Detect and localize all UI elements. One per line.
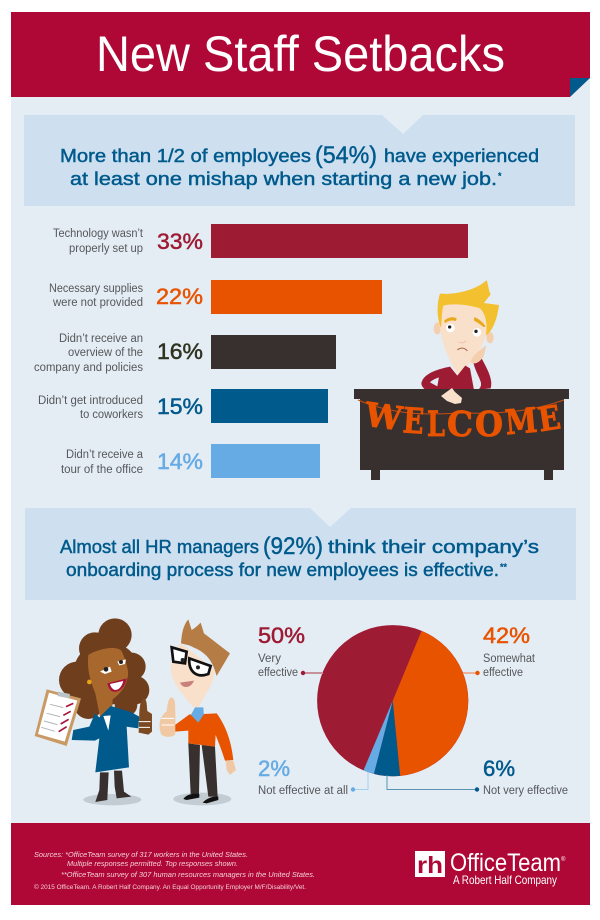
- sources: Sources: *OfficeTeam survey of 317 workers in the United States.: [34, 850, 248, 859]
- pie label: 2%: [258, 756, 368, 797]
- callout text: [60, 142, 539, 189]
- row: technology: 33%: [157, 229, 203, 254]
- row: coworkers: 15%: [157, 394, 203, 419]
- pie label: 6%: Not very effective: [483, 785, 568, 797]
- callout text: [60, 533, 539, 580]
- slice: not very effective: [374, 701, 400, 776]
- pie label: 42%: 42%: [483, 623, 530, 648]
- callout text: More than 1/2 of employees: [60, 146, 311, 166]
- row: coworkers: [38, 389, 328, 423]
- icon: welcome banner: W: [362, 395, 406, 439]
- pie label: 50%: Very: [258, 653, 281, 665]
- panel: title banner: [11, 12, 590, 97]
- row: overview: [34, 333, 336, 374]
- sources: **OfficeTeam survey of 307 human resources managers in the United States.: [61, 870, 315, 879]
- icon: man: [421, 280, 499, 398]
- shadows: [83, 794, 141, 805]
- pie label: 50%: 50%: [258, 623, 305, 648]
- icon: welcome banner: O: [475, 404, 503, 445]
- row: coworkers: Didn’t get introduced: [38, 395, 143, 407]
- illustration: bored man at welcome desk: [354, 280, 569, 480]
- logo: [415, 849, 566, 887]
- sources: [34, 850, 315, 879]
- row: overview: overview of the: [68, 347, 143, 359]
- row: technology: [53, 224, 468, 258]
- panel: page background: [11, 97, 590, 824]
- logo: OfficeTeam: [450, 849, 561, 877]
- woman: [35, 618, 152, 802]
- icon: welcome banner: E: [401, 400, 425, 443]
- row: overview: company and policies: [34, 362, 143, 374]
- panel: HR managers callout: [25, 508, 576, 600]
- pie label: 2%: 2%: [258, 756, 290, 781]
- callout text: (92%): [263, 533, 323, 560]
- icon: welcome banner: L: [427, 404, 445, 445]
- desk: [354, 389, 569, 480]
- row: supplies: 22%: [156, 284, 203, 309]
- row: overview: 16%: [157, 339, 203, 364]
- pie label: 6%: 6%: [483, 756, 515, 781]
- row: coworkers: to coworkers: [80, 409, 143, 421]
- callout text: Almost all HR managers: [60, 537, 259, 557]
- pie label: 42%: Somewhat: [483, 653, 536, 665]
- row: tour: Didn’t receive a: [66, 449, 144, 461]
- logo: rh: [417, 852, 443, 878]
- slice: somewhat effective: [393, 631, 468, 776]
- slice: not effective at all: [364, 701, 393, 774]
- callout text: have experienced: [384, 146, 539, 166]
- row: tour: tour of the office: [61, 464, 143, 476]
- logo: A Robert Half Company: [453, 873, 557, 887]
- copyright: © 2015 OfficeTeam. A Robert Half Company. An Equal Opportunity Employer M/F/Disability/Vet.: [34, 883, 306, 891]
- pie label: 2%: Not effective at all: [258, 785, 348, 797]
- callout text: **: [500, 562, 508, 572]
- slice: very effective: [317, 625, 468, 776]
- pie label: 42%: effective: [483, 667, 523, 679]
- illustration: woman and man giving thumbs up: [35, 618, 236, 805]
- icon: man's hand on desk: [441, 388, 462, 404]
- pie chart: [317, 625, 468, 776]
- callout text: onboarding process for new employees is effective.: [66, 560, 499, 580]
- row: technology: properly set up: [69, 243, 143, 255]
- man: [160, 619, 236, 803]
- title: New Staff Setbacks: [96, 26, 505, 82]
- pie label: 6%: [387, 756, 568, 797]
- pie label: 50%: effective: [258, 667, 298, 679]
- logo: ®: [561, 856, 566, 863]
- bar chart: mishaps: [34, 224, 468, 478]
- pie label: 42%: [463, 623, 536, 679]
- row: supplies: were not provided: [52, 297, 143, 309]
- callout text: think their company’s: [328, 537, 539, 557]
- clipboard: [35, 689, 81, 746]
- row: overview: Didn’t receive an: [59, 333, 143, 345]
- row: supplies: [49, 280, 382, 314]
- panel: footer: [11, 823, 590, 905]
- callout text: at least one mishap when starting a new job.: [70, 169, 497, 189]
- panel: employee callout: [24, 115, 575, 206]
- row: tour: [61, 444, 320, 478]
- icon: welcome banner: C: [447, 404, 473, 445]
- icon: welcome banner: M: [503, 401, 539, 443]
- callout text: (54%): [315, 142, 377, 169]
- pie label: 50%: [258, 623, 323, 679]
- row: technology: Technology wasn’t: [53, 228, 144, 240]
- row: supplies: Necessary supplies: [49, 283, 143, 295]
- icon: welcome banner: E: [535, 398, 563, 439]
- sources: Multiple responses permitted. Top responses shown.: [67, 859, 238, 868]
- row: tour: 14%: [157, 449, 203, 474]
- callout text: *: [498, 171, 502, 181]
- icon: welcome banner: [358, 395, 564, 445]
